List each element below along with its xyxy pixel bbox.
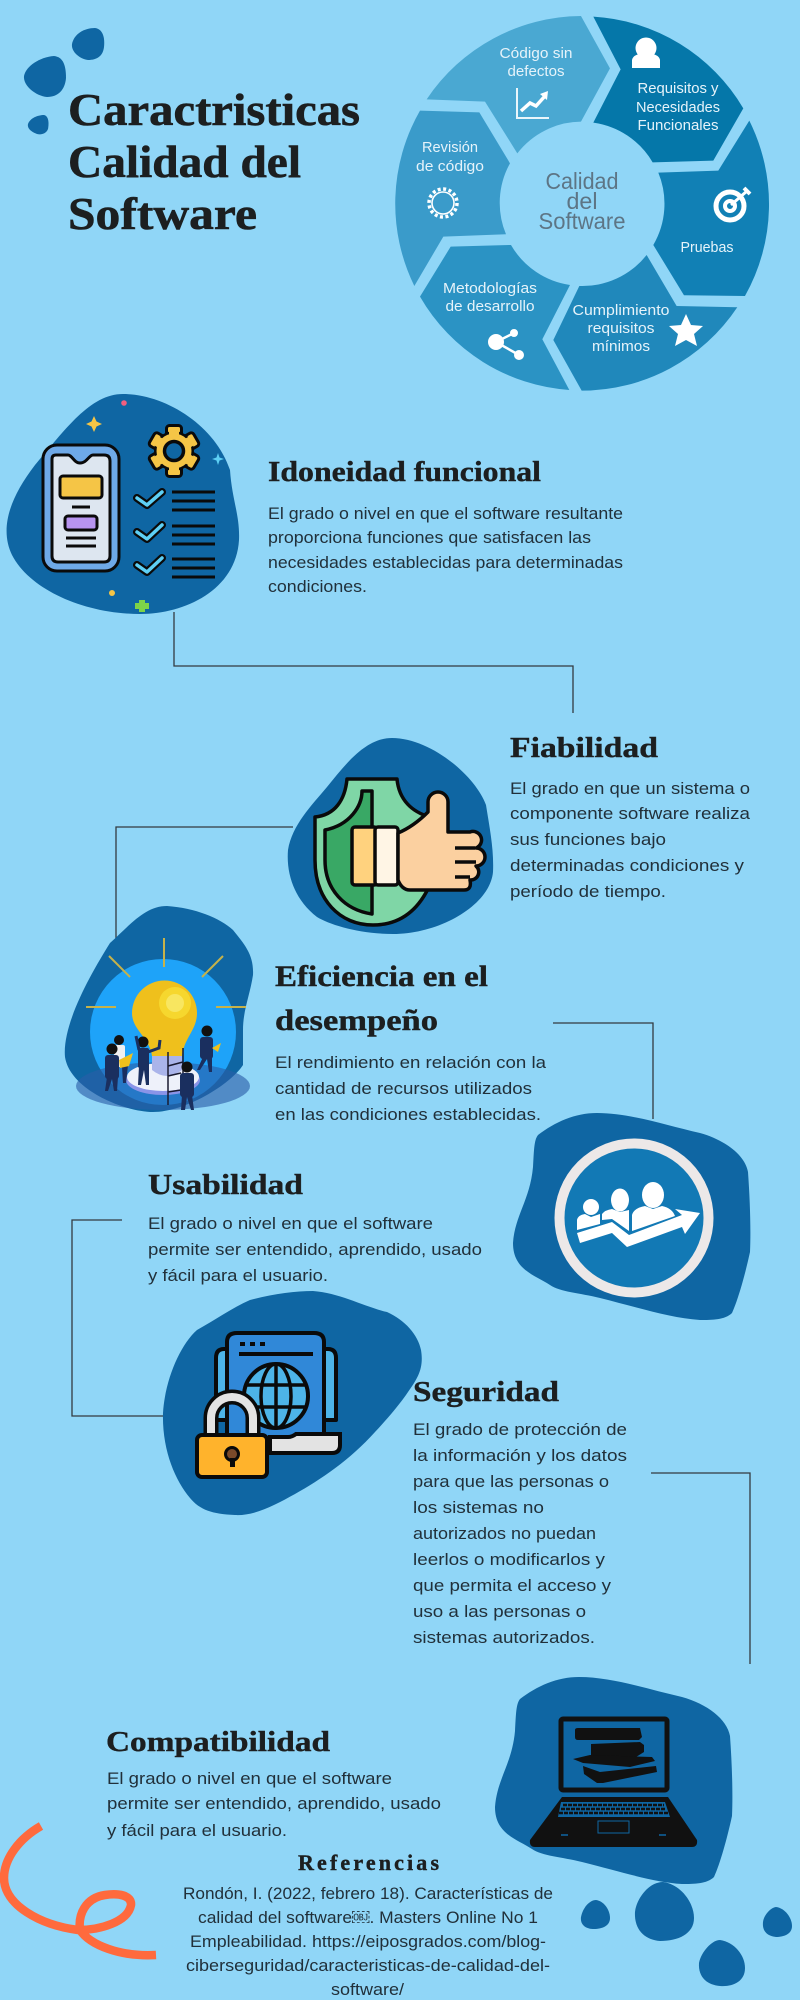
icon: person	[632, 38, 660, 68]
window and globe	[216, 1333, 336, 1436]
section: fiabilidad: período de tiempo.	[510, 883, 666, 901]
title	[68, 84, 360, 239]
section: fiabilidad	[510, 732, 751, 901]
blob with icon: web security lock	[163, 1291, 422, 1515]
connector: eficiencia to usabilidad	[553, 1023, 653, 1119]
blob with icon: phone checklist	[7, 394, 239, 614]
section: referencias: calidad del software￼. Masters Online No 1	[198, 1909, 538, 1927]
people	[105, 1026, 221, 1110]
section: fiabilidad: El grado en que un sistema o	[510, 780, 750, 798]
section: compatibilidad: permite ser entendido, aprendido, usado	[107, 1795, 441, 1813]
gear	[150, 427, 198, 475]
light circle	[90, 959, 236, 1105]
icon: rising chart	[517, 88, 549, 118]
section: idoneidad funcional: necesidades establecidas para determinadas	[268, 554, 623, 572]
section: eficiencia en el desempeño	[275, 960, 547, 1124]
segment labels: Necesidades	[636, 100, 720, 116]
segment labels: Cumplimiento	[572, 303, 670, 319]
padlock	[197, 1397, 267, 1477]
section: referencias	[183, 1850, 553, 1999]
section: fiabilidad: componente software realiza	[510, 805, 751, 823]
section: eficiencia en el desempeño: cantidad de recursos utilizados	[275, 1080, 532, 1098]
hand	[398, 792, 485, 890]
section: eficiencia en el desempeño: El rendimiento en relación con la	[275, 1054, 547, 1072]
decorative blobs top left	[24, 28, 104, 134]
section: seguridad: El grado de protección de	[413, 1421, 627, 1439]
section: usabilidad: y fácil para el usuario.	[148, 1267, 328, 1285]
segment labels: defectos	[508, 64, 564, 80]
icon: star	[669, 314, 703, 346]
segment labels	[416, 46, 734, 355]
section: compatibilidad: y fácil para el usuario.	[107, 1822, 287, 1840]
section: usabilidad: Usabilidad	[148, 1169, 303, 1201]
phone	[43, 445, 119, 571]
rays	[86, 938, 246, 1007]
segment labels: Metodologías	[443, 281, 537, 297]
section: seguridad: Seguridad	[413, 1376, 559, 1408]
section: eficiencia en el desempeño: Eficiencia en el	[275, 960, 488, 993]
section: referencias: software/	[331, 1981, 404, 1999]
section: compatibilidad	[106, 1726, 441, 1840]
segment labels: Funcionales	[638, 118, 718, 134]
ring	[560, 1144, 708, 1292]
segment labels: Revisión	[422, 140, 478, 156]
center label	[538, 168, 626, 234]
blob with icon: shield thumbs up	[288, 738, 493, 934]
section: referencias: Referencias	[298, 1850, 439, 1875]
center label: Calidad	[546, 168, 618, 194]
bulb	[126, 980, 200, 1095]
segments of the cycle	[395, 16, 769, 391]
connector: usabilidad to seguridad	[72, 1220, 164, 1416]
title: Calidad del	[68, 136, 301, 187]
section: seguridad: leerlos o modificarlos y	[413, 1551, 606, 1569]
cuff	[352, 827, 398, 885]
blob with icon: laptop with books	[495, 1677, 732, 1884]
laptop base	[270, 1434, 340, 1453]
section: idoneidad funcional: condiciones.	[268, 578, 367, 596]
section: fiabilidad: sus funciones bajo	[510, 831, 666, 849]
center label: del	[566, 188, 598, 214]
section: usabilidad: El grado o nivel en que el software	[148, 1215, 433, 1233]
section: seguridad: sistemas autorizados.	[413, 1629, 595, 1647]
connector: idoneidad to fiabilidad	[174, 612, 573, 713]
segment labels: Pruebas	[680, 240, 734, 256]
icon: share	[488, 330, 524, 360]
decorative blobs bottom right	[581, 1882, 792, 1986]
section: compatibilidad: El grado o nivel en que el software	[107, 1770, 392, 1788]
blob with illustration: lightbulb team	[65, 906, 253, 1112]
section: idoneidad funcional: proporciona funciones que satisfacen las	[268, 529, 591, 547]
section: seguridad: la información y los datos	[413, 1447, 627, 1465]
section: referencias: Empleabilidad. https://eiposgrados.com/blog-	[190, 1933, 546, 1951]
segment labels: de desarrollo	[446, 299, 534, 315]
checklist	[137, 492, 215, 577]
section: eficiencia en el desempeño: desempeño	[275, 1004, 438, 1037]
icon: gear ring	[429, 189, 457, 217]
section: referencias: ciberseguridad/caracteristicas-de-calidad-del-	[186, 1957, 550, 1975]
icon: target	[716, 188, 750, 220]
ground shadow	[76, 1062, 250, 1110]
laptop base	[530, 1797, 697, 1847]
segment labels: Requisitos y	[638, 81, 719, 97]
section: idoneidad funcional: Idoneidad funcional	[268, 456, 541, 488]
segment labels: Código sin	[500, 46, 572, 62]
section: seguridad: los sistemas no	[413, 1499, 544, 1517]
section: idoneidad funcional: El grado o nivel en que el software resultante	[268, 505, 623, 523]
laptop screen	[561, 1719, 667, 1790]
section: compatibilidad: Compatibilidad	[106, 1726, 330, 1758]
section: eficiencia en el desempeño: en las condiciones establecidas.	[275, 1106, 541, 1124]
sparkles	[86, 400, 224, 612]
section: seguridad: que permita el acceso y	[413, 1577, 612, 1595]
segment labels: de código	[416, 159, 484, 175]
section: seguridad: autorizados no puedan	[413, 1525, 596, 1543]
segment labels: mínimos	[592, 339, 650, 355]
shield	[315, 779, 432, 925]
section: fiabilidad: determinadas condiciones y	[510, 857, 745, 875]
circular diagram: calidad del software	[395, 16, 769, 391]
center label: Software	[538, 208, 626, 234]
section: seguridad: para que las personas o	[413, 1473, 609, 1491]
section: fiabilidad: Fiabilidad	[510, 732, 658, 764]
section: referencias: Rondón, I. (2022, febrero 18). Características de	[183, 1885, 553, 1903]
section: idoneidad funcional	[268, 456, 623, 596]
decorative orange squiggle	[4, 1826, 156, 1955]
connector: seguridad to compatibilidad	[651, 1473, 750, 1664]
title: Software	[68, 188, 257, 239]
section: usabilidad: permite ser entendido, aprendido, usado	[148, 1241, 482, 1259]
section: usabilidad	[148, 1169, 482, 1285]
section: seguridad: uso a las personas o	[413, 1603, 586, 1621]
segment labels: requisitos	[588, 321, 654, 337]
section: seguridad	[413, 1376, 627, 1647]
connector: fiabilidad to eficiencia	[116, 827, 293, 940]
people and arrow	[577, 1182, 700, 1247]
blob with icon: team growth	[513, 1113, 750, 1320]
title: Caractristicas	[68, 84, 360, 135]
